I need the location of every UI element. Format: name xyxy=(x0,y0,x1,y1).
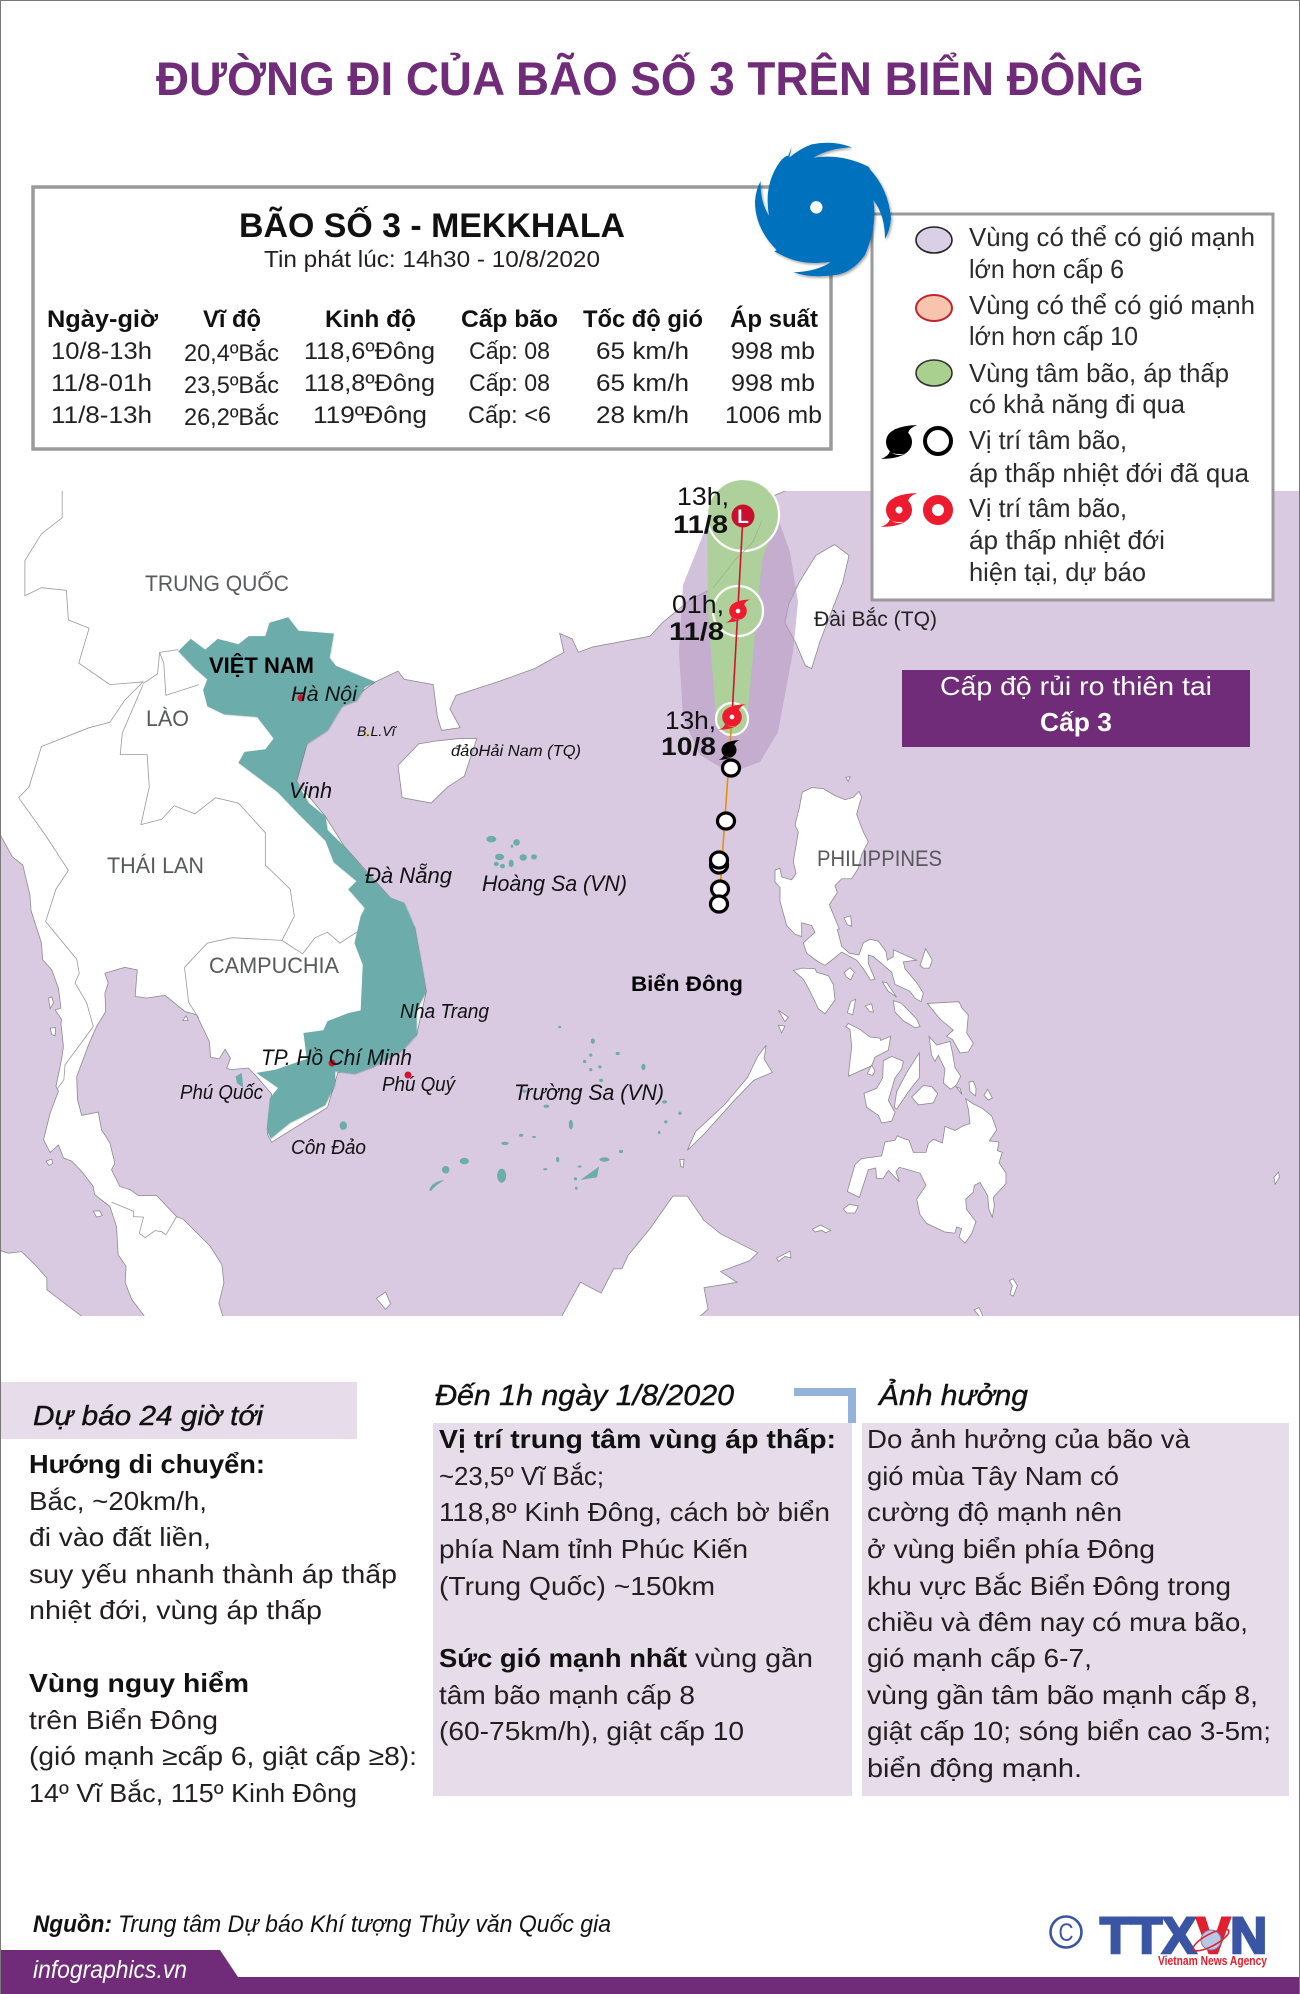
position body: (60-75km/h), giật cấp 10 xyxy=(439,1716,744,1746)
Vietnam islands xyxy=(235,836,682,1191)
table header row: Vĩ độ xyxy=(203,306,261,333)
track time labels xyxy=(661,483,729,761)
table rows: 998 mb xyxy=(731,338,815,365)
table header row xyxy=(47,305,818,333)
place labels: Hà Nội xyxy=(291,683,358,706)
forecast text: đi vào đất liền, xyxy=(29,1522,211,1552)
city dots xyxy=(298,694,412,1078)
source: Nguồn: xyxy=(33,1911,112,1938)
icon: low pressure L xyxy=(732,504,754,528)
icon: black storm position xyxy=(718,740,740,760)
bold map labels: VIỆT NAM xyxy=(209,653,314,678)
place labels: Phú Quý xyxy=(382,1074,456,1096)
table rows: 11/8-13h xyxy=(51,402,152,429)
table rows xyxy=(51,338,822,431)
table rows: Cấp: 08 xyxy=(469,370,550,397)
logo: TTXVN: TTXVN xyxy=(1100,1907,1267,1964)
position heading: Đến 1h ngày 1/8/2020 xyxy=(435,1380,734,1412)
country labels: LÀO xyxy=(146,706,189,731)
table rows: 65 km/h xyxy=(596,338,689,365)
issue time: Tin phát lúc: 14h30 - 10/8/2020 xyxy=(264,246,600,272)
legend text: Vị trí tâm bão, xyxy=(969,425,1127,455)
country labels: PHILIPPINES xyxy=(817,846,942,871)
icon: cyclone xyxy=(755,143,891,276)
legend text: lớn hơn cấp 6 xyxy=(969,254,1124,284)
impact body: cường độ mạnh nên xyxy=(867,1497,1122,1527)
panel: legend xyxy=(872,214,1273,600)
position body: phía Nam tỉnh Phúc Kiến xyxy=(439,1534,748,1564)
panel: current position xyxy=(433,1380,852,1796)
impact body: vùng gần tâm bão mạnh cấp 8, xyxy=(867,1680,1258,1710)
bold map labels xyxy=(209,653,743,996)
Philippines xyxy=(775,788,1017,1317)
impact body: gió mạnh cấp 6-7, xyxy=(867,1643,1092,1673)
legend text: Vùng tâm bão, áp thấp xyxy=(969,358,1229,388)
risk level box: Cấp 3 xyxy=(1040,707,1112,737)
Vietnam territory xyxy=(178,617,426,1139)
table rows: 20,4ºBắc xyxy=(184,340,279,367)
legend text: Vị trí tâm bão, xyxy=(969,493,1127,523)
forecast heading: Dự báo 24 giờ tới xyxy=(33,1400,264,1431)
risk level box xyxy=(902,670,1250,747)
table header row: Ngày-giờ xyxy=(47,306,159,333)
footer bar xyxy=(0,1950,1300,1994)
footer bar: infographics.vn xyxy=(33,1956,187,1984)
country labels: TRUNG QUỐC xyxy=(145,570,289,596)
country labels xyxy=(107,570,942,978)
place labels xyxy=(180,683,664,1159)
icon: red storm 13h xyxy=(718,704,746,730)
position body: Sức gió mạnh nhất xyxy=(439,1643,687,1673)
place labels: Hoàng Sa (VN) xyxy=(482,871,627,896)
icon: low pressure L: L xyxy=(737,507,749,528)
position body xyxy=(433,1423,852,1796)
table rows: Cấp: 08 xyxy=(469,338,550,365)
position body: ~23,5º Vĩ Bắc; xyxy=(439,1461,604,1491)
table header row: Áp suất xyxy=(730,305,818,333)
past positions xyxy=(710,760,740,912)
forecast text: Hướng di chuyển: xyxy=(29,1449,265,1479)
Taipei label: Đài Bắc (TQ) xyxy=(814,608,937,631)
table rows: 998 mb xyxy=(731,370,815,397)
impact body: giật cấp 10; sóng biển cao 3-5m; xyxy=(867,1716,1271,1746)
storm track line xyxy=(719,516,743,904)
faint coast under corridor xyxy=(713,520,762,588)
forecast heading xyxy=(0,1382,357,1439)
legend text: áp thấp nhiệt đới xyxy=(969,525,1165,555)
track time labels: 01h, xyxy=(672,591,724,619)
table rows: 11/8-01h xyxy=(51,370,152,397)
position body: tâm bão mạnh cấp 8 xyxy=(439,1680,695,1710)
table rows: 10/8-13h xyxy=(51,338,152,365)
track time labels: 11/8 xyxy=(673,511,728,539)
position body: vùng gần xyxy=(695,1643,813,1673)
radius circles xyxy=(707,479,779,735)
title: ĐƯỜNG ĐI CỦA BÃO SỐ 3 TRÊN BIỂN ĐÔNG xyxy=(156,52,1144,105)
country labels: CAMPUCHIA xyxy=(209,953,339,978)
table rows: 1006 mb xyxy=(725,402,822,429)
impact body: khu vực Bắc Biển Đông trong xyxy=(867,1571,1231,1601)
place labels: Phú Quốc xyxy=(180,1082,263,1104)
legend text: hiện tại, dự báo xyxy=(969,557,1146,587)
storm centre corridor xyxy=(707,479,779,735)
table rows: 23,5ºBắc xyxy=(184,372,279,399)
legend text xyxy=(969,222,1255,587)
track time labels: 11/8 xyxy=(669,618,724,646)
risk level box: Cấp độ rủi ro thiên tai xyxy=(940,671,1212,701)
place labels: Đà Nẵng xyxy=(365,863,453,888)
table rows: 28 km/h xyxy=(596,402,689,429)
legend text: áp thấp nhiệt đới đã qua xyxy=(969,458,1250,488)
position body: (Trung Quốc) ~150km xyxy=(439,1571,715,1601)
bold map labels: Biển Đông xyxy=(631,973,743,996)
icon: red storm 01h xyxy=(726,600,750,622)
track time labels: 13h, xyxy=(677,483,729,511)
track time labels: 10/8 xyxy=(661,733,716,761)
panel: storm info table xyxy=(33,187,831,449)
legend text: lớn hơn cấp 10 xyxy=(969,321,1138,351)
table rows: 118,6ºĐông xyxy=(304,338,435,365)
logo: TTXVN: Vietnam News Agency xyxy=(1158,1954,1267,1968)
forecast text: nhiệt đới, vùng áp thấp xyxy=(29,1595,322,1625)
forecast text: suy yếu nhanh thành áp thấp xyxy=(29,1559,397,1589)
impact heading: Ảnh hưởng xyxy=(877,1378,1028,1412)
table heading: BÃO SỐ 3 - MEKKHALA xyxy=(239,206,625,245)
impact body xyxy=(862,1423,1289,1796)
place labels: Nha Trang xyxy=(400,1001,489,1023)
place labels: TP. Hồ Chí Minh xyxy=(261,1045,412,1070)
impact body: gió mùa Tây Nam có xyxy=(867,1461,1119,1491)
legend icons xyxy=(881,227,952,527)
table rows: Cấp: <6 xyxy=(468,402,551,429)
table rows: 118,8ºĐông xyxy=(304,370,435,397)
table rows: 119ºĐông xyxy=(313,402,427,429)
forecast text xyxy=(29,1449,417,1808)
table header row: Kinh độ xyxy=(325,306,416,333)
west land mass xyxy=(0,480,787,1320)
place labels: Vinh xyxy=(289,778,332,803)
legend text: Vùng có thể có gió mạnh xyxy=(969,290,1255,320)
impact body: Do ảnh hưởng của bão và xyxy=(867,1424,1191,1454)
corner bracket xyxy=(794,1388,856,1423)
place labels: B.L.Vĩ xyxy=(357,723,398,739)
place labels: Côn Đảo xyxy=(291,1137,366,1159)
impact body: ở vùng biển phía Đông xyxy=(867,1534,1155,1564)
table header row: Cấp bão xyxy=(461,306,558,333)
place labels: Trường Sa (VN) xyxy=(514,1080,664,1105)
logo: TTXVN: C xyxy=(1058,1919,1074,1947)
table rows: 65 km/h xyxy=(596,370,689,397)
impact body: chiều và đêm nay có mưa bão, xyxy=(867,1607,1248,1637)
forecast text: Bắc, ~20km/h, xyxy=(29,1486,207,1516)
Taiwan xyxy=(680,545,1279,1184)
table rows: 26,2ºBắc xyxy=(184,404,279,431)
map xyxy=(0,479,1300,1320)
source: Trung tâm Dự báo Khí tượng Thủy văn Quốc gia xyxy=(118,1911,611,1938)
panel: 24h forecast xyxy=(0,1382,417,1808)
legend text: Vùng có thể có gió mạnh xyxy=(969,222,1255,252)
forecast text: (gió mạnh ≥cấp 6, giật cấp ≥8): xyxy=(29,1741,417,1771)
forecast text: 14º Vĩ Bắc, 115º Kinh Đông xyxy=(29,1778,357,1808)
forecast text: Vùng nguy hiểm xyxy=(29,1668,249,1698)
country labels: THÁI LAN xyxy=(107,853,204,878)
position body: Vị trí trung tâm vùng áp thấp: xyxy=(439,1424,836,1454)
wind danger zone xyxy=(679,479,798,773)
panel: impact xyxy=(862,1378,1289,1796)
impact body: biển động mạnh. xyxy=(867,1753,1082,1783)
forecast text: trên Biển Đông xyxy=(29,1705,218,1735)
track time labels: 13h, xyxy=(665,707,716,735)
table header row: Tốc độ gió xyxy=(583,306,703,333)
place labels: đảoHải Nam (TQ) xyxy=(451,743,581,760)
legend text: có khả năng đi qua xyxy=(969,389,1186,419)
position body: 118,8º Kinh Đông, cách bờ biển xyxy=(439,1497,830,1527)
